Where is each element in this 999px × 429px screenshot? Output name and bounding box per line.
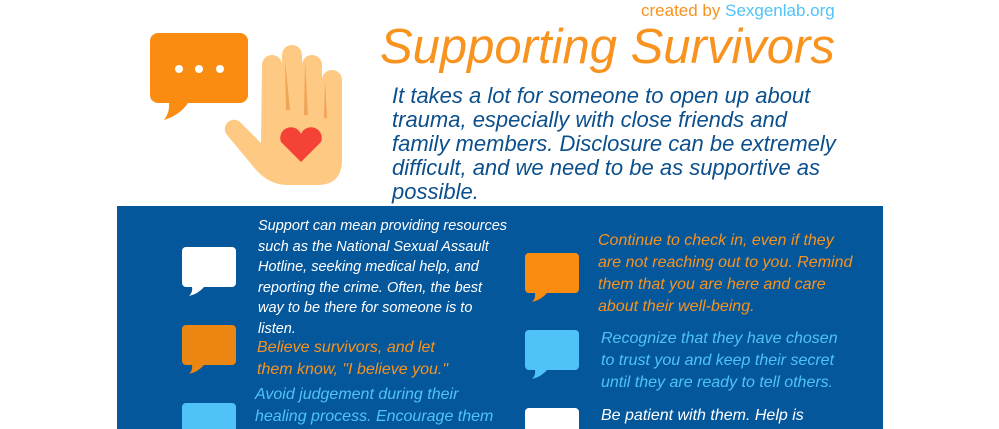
intro text: family members. Disclosure can be extremely bbox=[392, 131, 836, 156]
icon: light blue bubble right bbox=[525, 330, 579, 379]
title: Supporting Survivors bbox=[380, 20, 835, 74]
icon: orange bubble bbox=[182, 325, 236, 374]
tip 6 text: Be patient with them. Help is bbox=[601, 407, 804, 424]
tip 5 text bbox=[601, 330, 838, 391]
tip 5 text: until they are ready to tell others. bbox=[601, 374, 833, 391]
tip 1 text: reporting the crime. Often, the best bbox=[258, 280, 482, 296]
tip 4 text: are not reaching out to you. Remind bbox=[598, 254, 852, 271]
tip 1 text: such as the National Sexual Assault bbox=[258, 238, 489, 254]
icon: speech bubble and hand bbox=[150, 33, 342, 185]
tip 3 text: healing process. Encourage them bbox=[255, 408, 493, 425]
tip 1 text: way to be there for someone is to bbox=[258, 300, 472, 316]
tip 5 text: Recognize that they have chosen bbox=[601, 330, 838, 347]
tip 4 text: them that you are here and care bbox=[598, 276, 826, 293]
panel: tips bbox=[117, 206, 883, 429]
tip 1 text: Support can mean providing resources bbox=[258, 218, 507, 234]
icon: white bubble bbox=[182, 247, 236, 296]
tip 4 text: about their well-being. bbox=[598, 298, 755, 315]
intro text: possible. bbox=[392, 179, 479, 204]
tip 2 text: them know, "I believe you." bbox=[257, 361, 448, 378]
icon: white bubble right bbox=[525, 408, 579, 429]
tip 2 text bbox=[257, 339, 449, 378]
intro text: It takes a lot for someone to open up about bbox=[392, 83, 810, 108]
tip 1 text: Hotline, seeking medical help, and bbox=[258, 259, 479, 275]
icon: orange bubble right bbox=[525, 253, 579, 302]
intro text: trauma, especially with close friends and bbox=[392, 107, 787, 132]
tip 4 text bbox=[598, 232, 853, 315]
tip 3 text: Avoid judgement during their bbox=[255, 386, 458, 403]
credit: created by Sexgenlab.org bbox=[641, 1, 835, 20]
tip 5 text: to trust you and keep their secret bbox=[601, 352, 834, 369]
intro text: difficult, and we need to be as supportive as bbox=[392, 155, 820, 180]
icon: light blue bubble bbox=[182, 403, 236, 429]
intro text bbox=[392, 83, 837, 204]
tip 2 text: Believe survivors, and let bbox=[257, 339, 435, 356]
tip 3 text bbox=[254, 386, 493, 425]
tip 1 text bbox=[258, 218, 507, 336]
tip 1 text: listen. bbox=[258, 320, 296, 336]
tip 4 text: Continue to check in, even if they bbox=[598, 232, 834, 249]
